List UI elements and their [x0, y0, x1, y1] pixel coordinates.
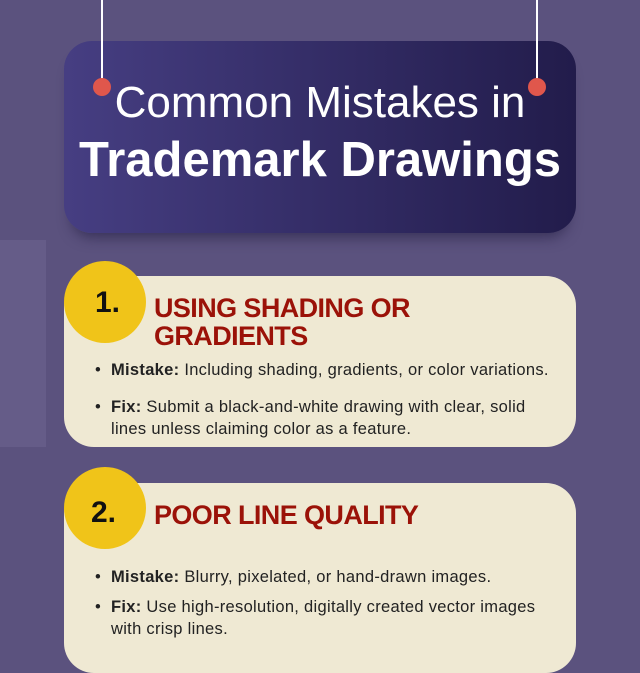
badge 2	[64, 467, 146, 549]
badge 1: 1.	[95, 286, 120, 319]
decorative chevron	[0, 240, 46, 447]
heading 2: POOR LINE QUALITY	[154, 500, 418, 530]
bullets 1	[96, 361, 549, 438]
bullets 2	[96, 568, 535, 638]
hanging strings	[93, 0, 546, 96]
title box	[64, 41, 576, 233]
bullets 1: lines unless claiming color as a feature.	[111, 420, 411, 438]
heading 1: USING SHADING OR	[154, 293, 410, 323]
badge 1	[64, 261, 146, 343]
card 2	[64, 483, 576, 673]
heading 1	[154, 293, 410, 351]
card 1	[64, 276, 576, 447]
badge 2: 2.	[91, 496, 116, 529]
bullets 2: Fix: Use high-resolution, digitally created vector images	[111, 598, 535, 616]
bullets 1: Mistake: Including shading, gradients, or color variations.	[111, 361, 549, 379]
title text	[79, 78, 561, 187]
title text: Trademark Drawings	[79, 133, 561, 187]
heading 1: GRADIENTS	[154, 321, 308, 351]
bullets 1: Fix: Submit a black-and-white drawing with clear, solid	[111, 398, 526, 416]
bullets 2: Mistake: Blurry, pixelated, or hand-drawn images.	[111, 568, 491, 586]
bullets 2: with crisp lines.	[111, 620, 228, 638]
title text: Common Mistakes in	[115, 78, 525, 127]
